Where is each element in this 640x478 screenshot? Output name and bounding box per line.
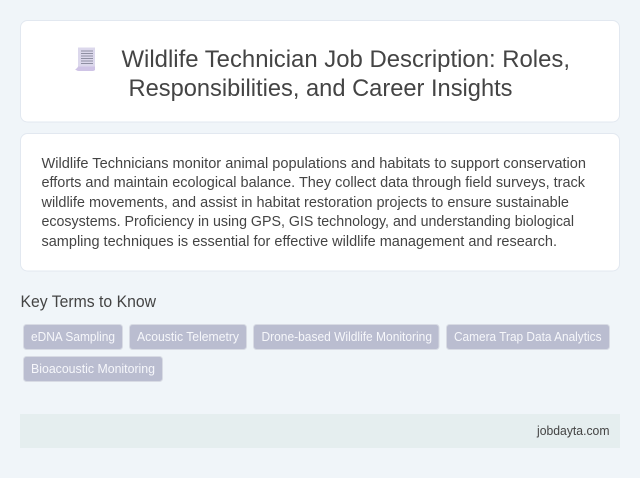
description text: ecosystems. Proficiency in using GPS, GIS technology, and understanding biological	[42, 213, 574, 230]
title text	[122, 46, 570, 102]
footer source text: jobdayta.com	[536, 424, 610, 438]
description text: wildlife movements, and assist in habitat restoration projects to ensure sustainable	[41, 194, 569, 211]
description text: Wildlife Technicians monitor animal populations and habitats to support conservation	[42, 155, 586, 172]
tag: eDNA Sampling	[24, 324, 122, 350]
tag: Acoustic Telemetry	[130, 324, 246, 350]
description text	[41, 155, 586, 250]
panel: title	[20, 20, 620, 122]
tag: eDNA Sampling: eDNA Sampling	[31, 330, 115, 344]
title text: Wildlife Technician Job Description: Roles,	[122, 46, 570, 73]
footer bar	[20, 414, 620, 448]
panel: description	[20, 134, 620, 271]
tag: Bioacoustic Monitoring: Bioacoustic Monitoring	[31, 362, 155, 376]
tag: Camera Trap Data Analytics: Camera Trap Data Analytics	[454, 330, 602, 344]
description text: sampling techniques is essential for effective wildlife management and research.	[42, 233, 557, 250]
tag: Acoustic Telemetry: Acoustic Telemetry	[137, 330, 240, 344]
tag: Bioacoustic Monitoring	[24, 356, 162, 382]
description text: efforts and maintain ecological balance. They collect data through field surveys, track	[42, 174, 585, 191]
tags: key terms	[24, 324, 610, 382]
heading: key terms: Key Terms to Know	[20, 293, 156, 311]
title text: Responsibilities, and Career Insights	[128, 75, 512, 102]
tag: Camera Trap Data Analytics	[446, 324, 610, 350]
tag: Drone-based Wildlife Monitoring: Drone-based Wildlife Monitoring	[262, 330, 432, 344]
tag: Drone-based Wildlife Monitoring	[254, 324, 439, 350]
icon: document scroll	[75, 48, 95, 71]
